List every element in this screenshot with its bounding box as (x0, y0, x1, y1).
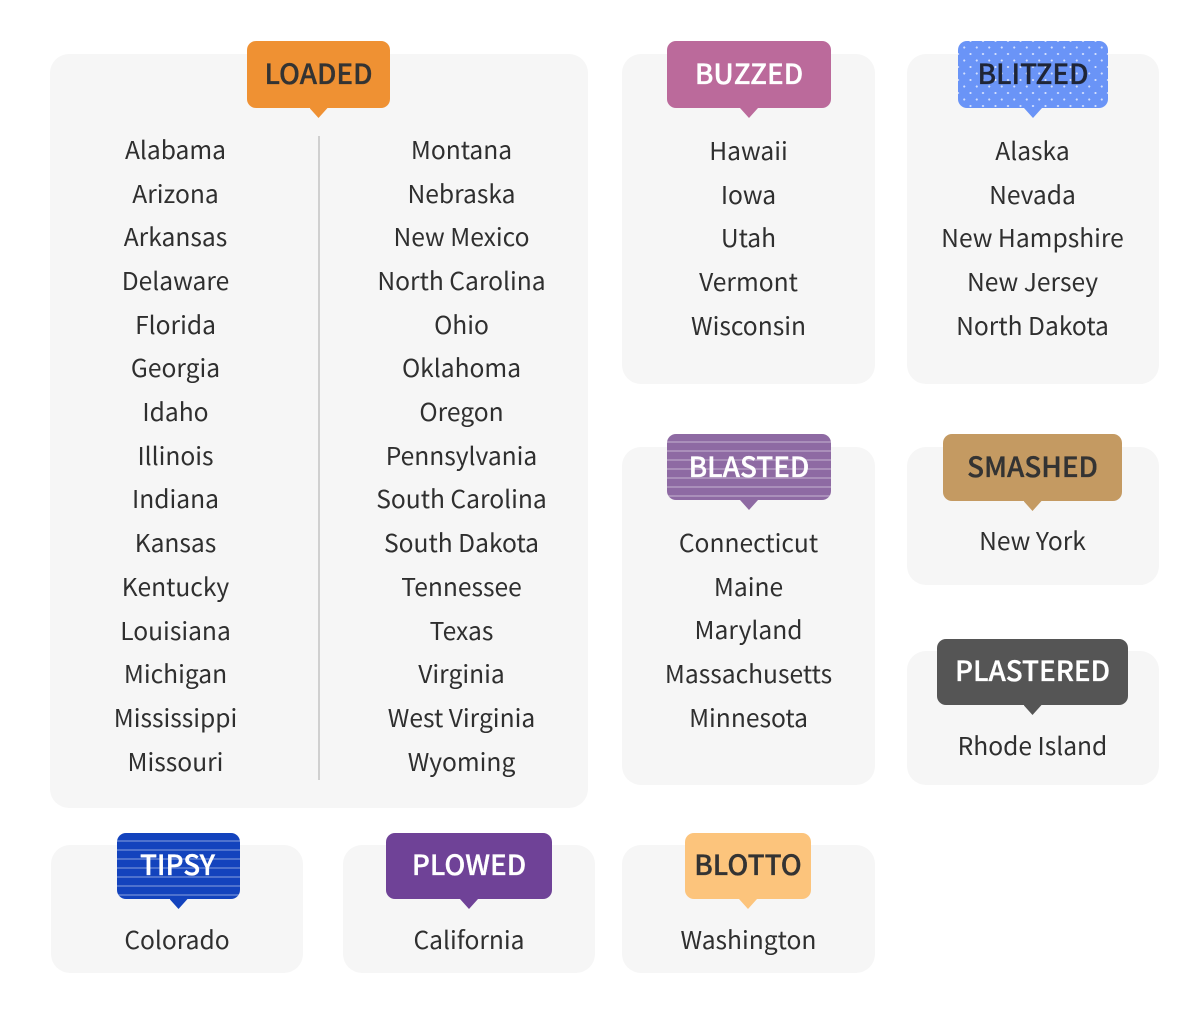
panel: tipsy (51, 845, 303, 973)
list: buzzed: Utah (721, 219, 776, 255)
list: blasted: Massachusetts (665, 655, 832, 691)
list: loaded column 2: Wyoming (408, 743, 515, 779)
divider (318, 136, 320, 780)
list: blasted: Maine (714, 568, 783, 604)
badge: loaded: LOADED (264, 53, 373, 93)
badge: blitzed (958, 41, 1108, 108)
list: loaded column 1: Indiana (132, 480, 219, 516)
list: blitzed (941, 132, 1124, 343)
badge: tipsy: TIPSY (140, 844, 215, 884)
list: loaded column 1: Kansas (135, 524, 216, 560)
list: blasted: Connecticut (679, 524, 818, 560)
list: buzzed (691, 132, 806, 343)
badge: blitzed: BLITZED (977, 53, 1089, 93)
panel: plastered (907, 651, 1159, 785)
list: blotto: Washington (681, 921, 816, 957)
list: loaded column 2: Montana (411, 131, 512, 167)
panel: blitzed (907, 54, 1159, 384)
badge: smashed (943, 434, 1122, 501)
list: loaded column 1: Arizona (132, 174, 219, 210)
list: loaded column 1: Georgia (131, 349, 220, 385)
list: smashed: New York (979, 522, 1086, 558)
panel: loaded (50, 54, 588, 808)
list: blitzed: New Jersey (967, 263, 1098, 299)
list: loaded column 1: Louisiana (120, 612, 231, 648)
list: loaded column 1 (114, 131, 237, 779)
badge: plowed: PLOWED (412, 844, 526, 884)
list: tipsy: Colorado (124, 921, 230, 957)
badge: buzzed: BUZZED (695, 53, 803, 93)
list: loaded column 2 (376, 131, 547, 779)
list: loaded column 2: Texas (430, 612, 493, 648)
list: blasted: Minnesota (689, 699, 808, 735)
list: loaded column 1: Illinois (137, 437, 214, 473)
list: loaded column 2: South Dakota (384, 524, 539, 560)
list: loaded column 2: Oregon (419, 393, 504, 429)
badge: buzzed (667, 41, 831, 108)
list: blasted: Maryland (695, 611, 802, 647)
list: loaded column 2: North Carolina (377, 262, 546, 298)
list: blitzed: Alaska (995, 132, 1070, 168)
list: loaded column 2: Tennessee (401, 568, 522, 604)
badge: smashed: SMASHED (967, 446, 1098, 486)
list: buzzed: Wisconsin (691, 307, 806, 343)
list: blitzed: Nevada (989, 176, 1076, 212)
list: blitzed: New Hampshire (941, 219, 1124, 255)
badge: blotto (685, 833, 811, 899)
badge: tipsy (117, 833, 240, 899)
list: plastered: Rhode Island (958, 727, 1107, 763)
badge: blasted (667, 434, 831, 500)
panel: plowed (343, 845, 595, 973)
list: buzzed: Vermont (699, 263, 798, 299)
list: loaded column 1: Missouri (128, 743, 223, 779)
list: loaded column 2: Ohio (434, 306, 489, 342)
list: loaded column 1: Idaho (142, 393, 209, 429)
panel: buzzed (622, 54, 875, 384)
list: loaded column 1: Arkansas (124, 218, 227, 254)
list: loaded column 2: Oklahoma (402, 349, 521, 385)
list: loaded column 1: Delaware (122, 262, 229, 298)
badge: loaded (247, 41, 390, 108)
badge: blotto: BLOTTO (694, 844, 802, 884)
badge: blasted: BLASTED (689, 446, 809, 486)
list: loaded column 2: Nebraska (408, 174, 516, 210)
list: loaded column 2: South Carolina (376, 480, 547, 516)
list: loaded column 1: Florida (135, 306, 216, 342)
badge: plastered: PLASTERED (955, 650, 1110, 690)
list: loaded column 2: Pennsylvania (386, 437, 537, 473)
badge: plastered (937, 639, 1128, 705)
list: loaded column 1: Michigan (124, 655, 227, 691)
list: buzzed: Hawaii (709, 132, 788, 168)
list: loaded column 1: Kentucky (122, 568, 229, 604)
list: blasted (665, 524, 832, 735)
list: loaded column 1: Alabama (125, 131, 226, 167)
list: loaded column 1: Mississippi (114, 699, 237, 735)
list: buzzed: Iowa (721, 176, 776, 212)
list: loaded column 2: West Virginia (388, 699, 535, 735)
badge: plowed (386, 833, 552, 899)
list: blitzed: North Dakota (956, 307, 1109, 343)
list: loaded column 2: New Mexico (393, 218, 530, 254)
panel: smashed (907, 447, 1159, 585)
panel: blotto (622, 845, 875, 973)
list: plowed: California (413, 921, 525, 957)
panel: blasted (622, 447, 875, 785)
list: loaded column 2: Virginia (418, 655, 505, 691)
